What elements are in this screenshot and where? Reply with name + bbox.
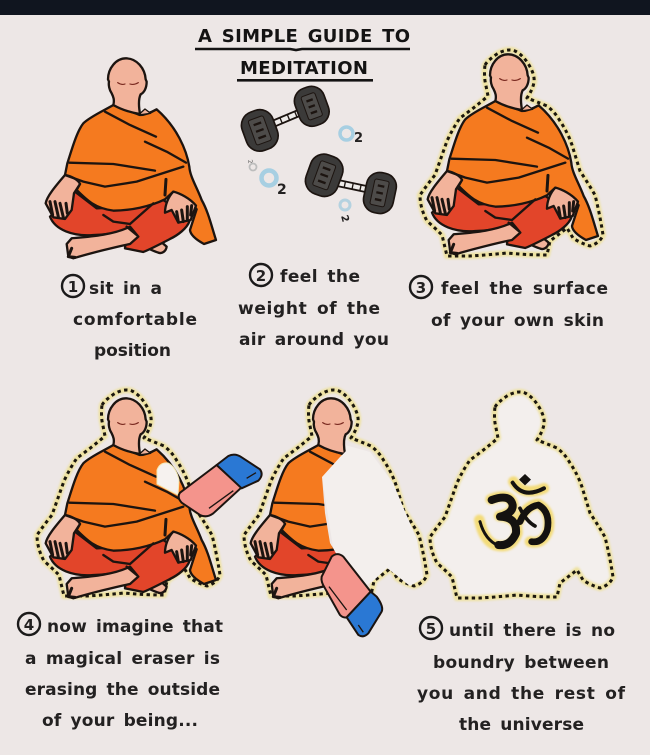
icon: eraser [179, 455, 262, 516]
caption: step 5: 5 [426, 620, 436, 638]
icon: small O2 bottom: 2 [338, 214, 351, 224]
caption: step 3: 3 [416, 279, 426, 297]
illustration: monk with eraser starting, step 4 [37, 390, 262, 598]
illustration: half erased monk, step 4 [244, 390, 427, 636]
icon: O2 upper right [340, 127, 363, 146]
caption: step 5 [417, 617, 626, 735]
icon: upper dumbbell [237, 83, 333, 155]
caption: step 2: feel the [280, 267, 360, 287]
icon: O2 left: 2 [277, 182, 287, 198]
caption: step 2: air around you [239, 330, 389, 350]
title: MEDITATION [240, 58, 368, 79]
illustration: seated monk, step 1 [46, 58, 216, 258]
title: A SIMPLE GUIDE TO [198, 26, 410, 47]
caption: step 4: a magical eraser is [25, 649, 220, 669]
caption: step 1: position [94, 341, 171, 361]
caption: step 3 [410, 276, 608, 331]
caption: step 2: 2 [256, 267, 266, 285]
caption: step 1: sit in a [89, 279, 162, 299]
caption: step 1: 1 [68, 278, 78, 296]
caption: step 1 [62, 275, 197, 361]
caption: step 4: erasing the outside [25, 680, 220, 700]
icon: faint O2 far left: 2 [246, 159, 254, 164]
caption: step 5: the universe [459, 715, 584, 735]
icon: O2 upper right: 2 [354, 131, 363, 146]
caption: step 4: of your being... [42, 711, 198, 731]
erased patch [157, 463, 179, 495]
caption: step 4: now imagine that [47, 617, 223, 637]
caption: step 1: comfortable [73, 310, 197, 330]
icon: eraser [321, 554, 382, 636]
caption: step 5: until there is no [449, 621, 615, 641]
icon: O2 left [262, 170, 287, 198]
illustration: dumbbells and oxygen [237, 83, 399, 224]
caption: step 4 [18, 613, 223, 731]
icon: faint O2 far left [246, 159, 256, 170]
caption: step 2 [238, 264, 389, 350]
erased silhouette [322, 445, 423, 595]
icon: om [479, 474, 549, 546]
caption: step 4: 4 [24, 616, 34, 634]
icon: small O2 bottom [338, 200, 351, 224]
caption: step 5: boundry between [433, 653, 609, 673]
illustration: om symbol in empty outline, step 5 [430, 392, 613, 598]
illustration: monk with aura, step 3 [420, 50, 603, 256]
caption: step 3: feel the surface [441, 279, 608, 299]
icon: lower dumbbell [301, 150, 399, 216]
caption: step 5: you and the rest of [417, 684, 626, 704]
top dark bar [0, 0, 650, 15]
caption: step 2: weight of the [238, 299, 380, 319]
caption: step 3: of your own skin [431, 311, 604, 331]
title [195, 26, 410, 82]
